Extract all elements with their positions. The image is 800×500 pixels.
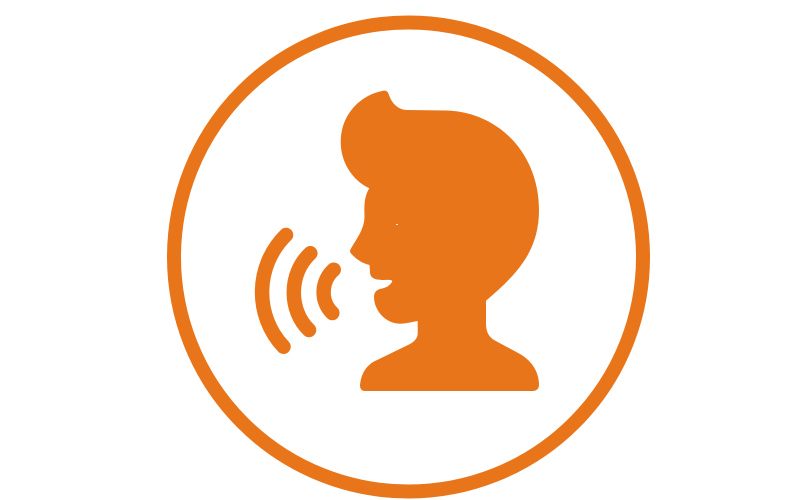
icon: head silhouette [341, 91, 539, 391]
icon: inner sound wave [324, 270, 334, 313]
icon: circle ring [174, 22, 643, 492]
icon: eye highlight [396, 224, 398, 225]
icon: outer sound wave [262, 235, 286, 347]
icon: sound waves [262, 235, 334, 347]
icon: middle sound wave [294, 253, 310, 330]
